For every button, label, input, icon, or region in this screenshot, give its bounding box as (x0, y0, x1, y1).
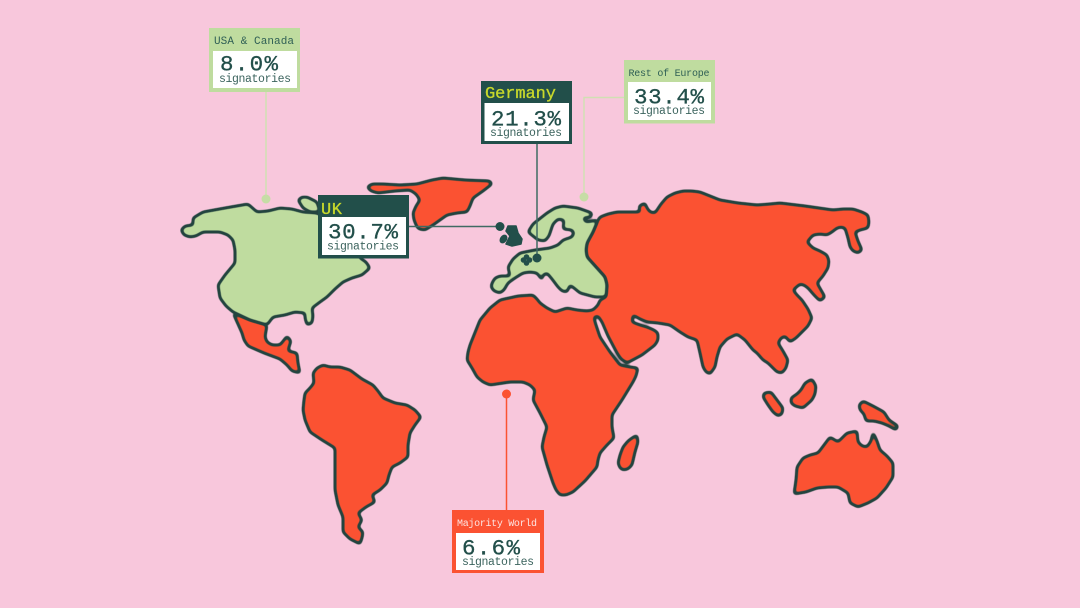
connector: UK (409, 222, 504, 231)
callout: Germany (481, 81, 572, 144)
callout: UK: UK (321, 201, 343, 220)
region: Sumatra (763, 392, 783, 416)
region: Australia (794, 431, 893, 507)
icon: Germany blob (521, 254, 532, 266)
callout: Majority World: 6.6% (462, 536, 520, 562)
connector: Germany (532, 144, 542, 262)
region: Eurasia, Middle East and Africa (467, 191, 869, 495)
region: Europe (491, 206, 607, 297)
callout: Majority World: Majority World (457, 518, 537, 530)
map: continents (181, 178, 898, 544)
callout: Rest of Europe: Rest of Europe (628, 68, 710, 80)
callout: Majority World: signatories (462, 556, 534, 569)
icon: UK islands (498, 226, 522, 246)
region: New Guinea (859, 401, 898, 430)
callout: USA & Canada (209, 28, 300, 92)
callout: Germany: Germany (485, 85, 556, 104)
region: North America (181, 204, 370, 325)
region: Madagascar (618, 435, 638, 470)
callout: Rest of Europe: signatories (633, 105, 705, 118)
callout: USA & Canada: USA & Canada (214, 36, 294, 48)
connector: Rest of Europe (580, 98, 624, 202)
region: Arctic island (298, 197, 320, 212)
region: Mexico and Central America (233, 313, 300, 373)
connector: Majority World (502, 390, 511, 510)
region: Borneo (791, 379, 816, 408)
callout: Rest of Europe: 33.4% (634, 84, 704, 110)
callout: Rest of Europe (624, 60, 715, 124)
callout: USA & Canada: 8.0% (220, 52, 278, 78)
region: South America (303, 365, 421, 544)
region: Greenland (367, 178, 492, 230)
callout: Germany: signatories (490, 127, 562, 140)
callout: UK: signatories (327, 240, 399, 254)
callout: UK: 30.7% (328, 220, 398, 246)
callout: UK (318, 195, 409, 258)
connector: USA and Canada (262, 92, 270, 204)
callout: Germany: 21.3% (491, 106, 561, 132)
callout: USA & Canada: signatories (219, 73, 291, 86)
callout: Majority World (452, 510, 544, 573)
